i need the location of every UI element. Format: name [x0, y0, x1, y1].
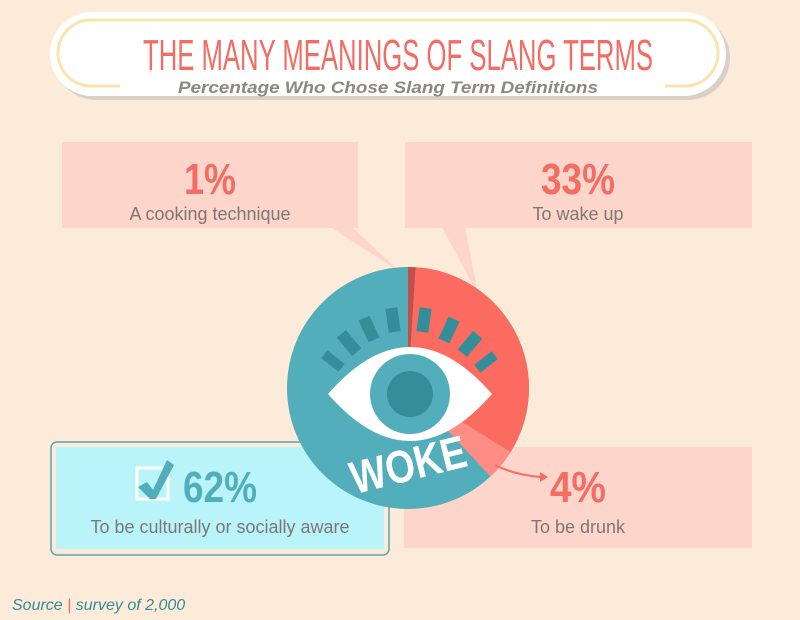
panel: to wake up — [405, 142, 752, 295]
icon: checkbox — [137, 460, 174, 499]
panel: to be drunk — [404, 447, 752, 548]
panel: cooking technique — [62, 142, 400, 272]
panel: culturally aware — [51, 442, 389, 555]
panel: culturally aware: To be culturally or socially aware — [90, 517, 350, 537]
panel: to wake up: 33% — [541, 155, 615, 204]
panel: cooking technique: A cooking technique — [129, 204, 291, 224]
panel: cooking technique: 1% — [184, 155, 236, 204]
subtitle: Percentage Who Chose Slang Term Definitions — [178, 78, 598, 97]
panel: culturally aware: 62% — [183, 463, 257, 512]
pie chart — [287, 267, 529, 509]
panel: to wake up: To wake up — [532, 204, 624, 224]
icon: eye lashes — [321, 307, 498, 373]
panel: to be drunk: To be drunk — [531, 517, 626, 537]
panel: to be drunk: 4% — [550, 463, 606, 512]
icon: eye — [328, 347, 492, 441]
WOKE label: WOKE — [345, 425, 472, 504]
source: Source | survey of 2,000 — [12, 597, 185, 614]
title banner — [50, 12, 730, 100]
arrow: drunk — [495, 465, 548, 482]
